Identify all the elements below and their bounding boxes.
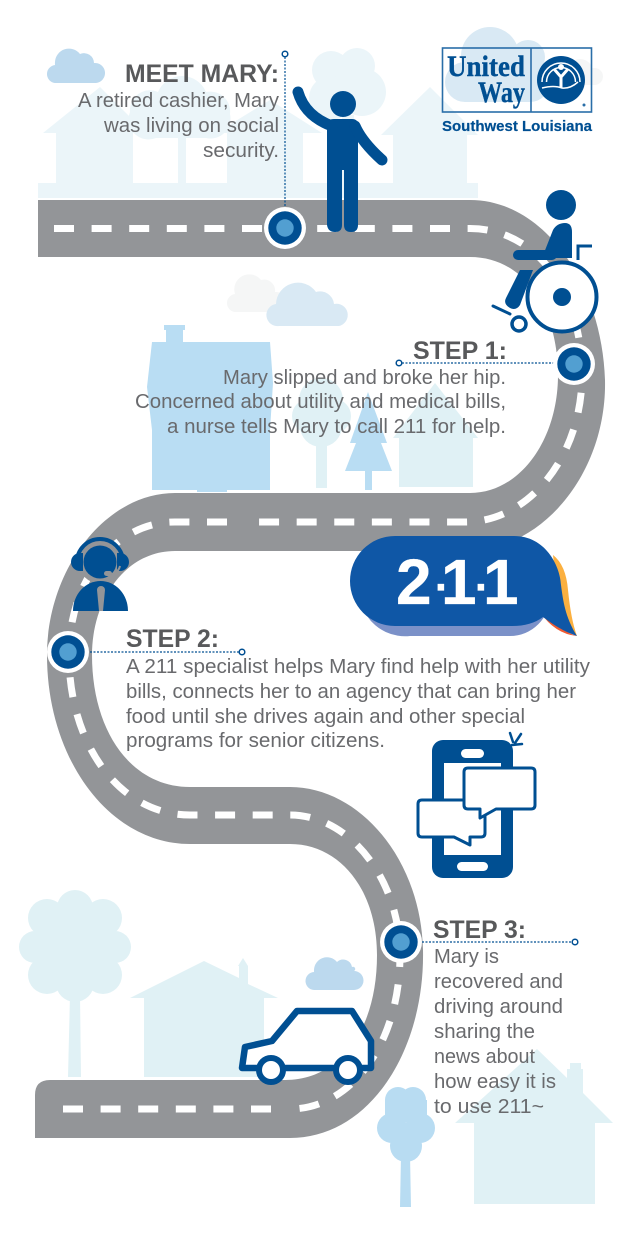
text: step 3: recovered and — [434, 970, 563, 993]
text: step 1: a nurse tells Mary to call 211 for help. — [167, 415, 506, 438]
step 3 dotted leader — [422, 939, 578, 945]
mid scenery: house — [393, 383, 478, 487]
road marker: step 2 — [47, 631, 89, 673]
logo: united way — [442, 48, 593, 135]
text: meet mary: was living on social — [103, 114, 279, 137]
text: step 3: sharing the — [434, 1020, 535, 1043]
text: step 2: bills, connects her to an agency that can bring her — [126, 680, 576, 703]
mid scenery: round tree — [292, 378, 351, 488]
mid scenery: tall building — [147, 325, 273, 492]
cloud: faint right of logo — [562, 59, 603, 85]
step 2 dotted leader — [90, 649, 245, 655]
mid scenery: pine tree — [345, 392, 392, 490]
text: meet mary: A retired cashier, Mary — [78, 89, 280, 112]
road marker: step 1 — [553, 343, 595, 385]
logo: united way: Way — [478, 76, 525, 109]
text: step 1 — [135, 337, 507, 438]
step 1 dotted leader — [396, 360, 556, 366]
text: step 2: food until she drives again and other special — [126, 705, 525, 728]
text: step 2: STEP 2: — [126, 625, 219, 653]
cloud: top left — [47, 49, 105, 83]
211 speech bubble: 1 — [483, 546, 519, 618]
bottom scenery: round tree — [19, 890, 131, 1077]
text: step 3: STEP 3: — [433, 916, 526, 944]
icon: car — [242, 1011, 371, 1082]
icon: phone with chat bubbles — [418, 733, 535, 878]
text: step 3 — [433, 916, 563, 1118]
road lane dashes — [48, 228, 582, 1109]
text: step 3: driving around — [434, 995, 563, 1018]
text: step 2: programs for senior citizens. — [126, 729, 385, 752]
text: step 1: Mary slipped and broke her hip. — [223, 366, 506, 389]
211 speech bubble — [350, 536, 577, 636]
211 speech bubble: 2 — [396, 546, 432, 618]
logo: united way: Southwest Louisiana — [442, 118, 593, 135]
211 speech bubble: · — [435, 563, 449, 612]
road marker: meet mary — [264, 207, 306, 249]
text: step 2 — [126, 625, 591, 752]
text: meet mary: security. — [203, 139, 279, 162]
icon: headset agent — [71, 539, 129, 611]
text: step 3: how easy it is — [434, 1070, 556, 1093]
211 speech bubble: · — [475, 563, 489, 612]
icon: wheelchair — [493, 190, 596, 332]
road marker: step 3 — [380, 921, 422, 963]
text: meet mary: MEET MARY: — [125, 60, 279, 88]
top neighbourhood scenery — [38, 48, 478, 198]
logo: united way: United — [447, 50, 525, 83]
bottom scenery: blue tree — [377, 1087, 435, 1207]
bottom scenery: large house — [455, 1049, 613, 1204]
bottom scenery: house — [130, 958, 278, 1077]
mid scenery clouds — [227, 274, 348, 326]
cloud: bottom — [305, 957, 364, 990]
text: step 3: news about — [434, 1045, 535, 1068]
road — [35, 200, 605, 1138]
text: step 3: to use 211~ — [434, 1095, 544, 1118]
text: meet mary — [78, 60, 280, 162]
text: step 1: STEP 1: — [413, 337, 507, 365]
text: step 3: Mary is — [434, 945, 499, 968]
text: step 1: Concerned about utility and medical bills, — [135, 390, 506, 413]
icon: mary standing — [298, 91, 382, 232]
cloud: behind logo — [445, 27, 550, 102]
text: step 2: A 211 specialist helps Mary find help with her utility — [126, 655, 591, 678]
meet mary dotted leader — [282, 51, 288, 210]
211 speech bubble: 1 — [441, 546, 477, 618]
